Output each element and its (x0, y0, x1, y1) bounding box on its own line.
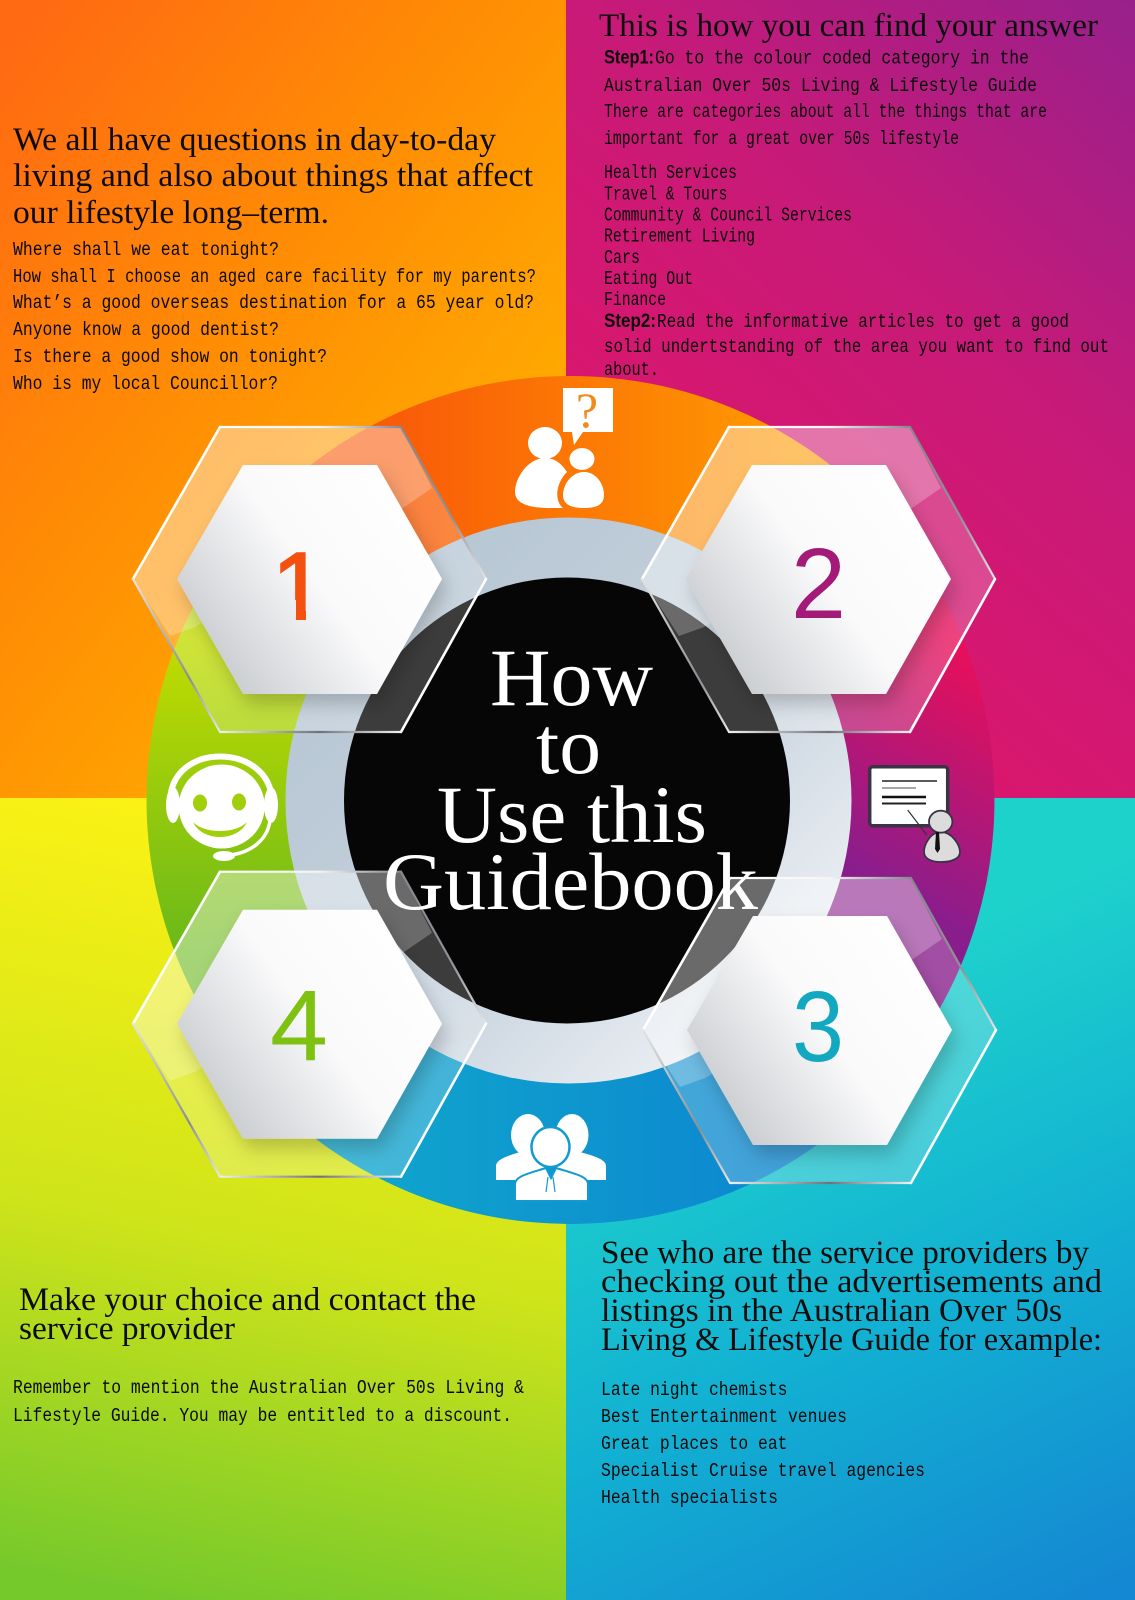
list: guide categories: Eating Out (604, 268, 693, 290)
icon: two people with question bubble: ? (576, 382, 598, 438)
text block: step 1: Go to the colour coded category in the (655, 48, 1029, 70)
icon: group of three people (496, 1114, 606, 1201)
list: service provider examples (601, 1379, 925, 1509)
background: orange quadrant (0, 0, 566, 798)
hexagon 1 (133, 427, 486, 732)
list: guide categories: Health Services (604, 162, 737, 184)
list: service provider examples: Late night chemists (601, 1379, 788, 1401)
heading: make your choice (19, 1282, 476, 1347)
hexagon 4 (133, 872, 486, 1177)
text block: step 2: Read the informative articles to get a good (657, 311, 1069, 333)
background: cyan-blue quadrant (566, 798, 1135, 1600)
text block: step 2 (604, 311, 1109, 381)
heading: everyday questions: our lifestyle long–term. (13, 195, 329, 231)
text block: step 2: Step2: (604, 311, 656, 332)
heading: see who are the service providers: Living & Lifestyle Guide for example: (601, 1322, 1102, 1358)
text block: example questions: Where shall we eat tonight? (13, 239, 279, 261)
text block: example questions: How shall I choose an aged care facility for my parents? (13, 266, 536, 288)
hexagon 3 (643, 878, 996, 1183)
heading: everyday questions (13, 122, 533, 231)
heading: make your choice: service provider (19, 1311, 235, 1347)
heading: see who are the service providers: listings in the Australian Over 50s (601, 1293, 1062, 1329)
text block: example questions (13, 239, 536, 395)
list: guide categories: Cars (604, 247, 640, 269)
icon: smiling headset agent (166, 756, 278, 861)
text block: mention the guide: Remember to mention the Australian Over 50s Living & (13, 1377, 524, 1399)
text block: example questions: Who is my local Councillor? (13, 373, 278, 395)
background: yellow-green quadrant (0, 798, 566, 1600)
text block: step 2: about. (604, 359, 659, 381)
text block: step 1: Step1: (604, 48, 654, 68)
title: Use this (437, 769, 707, 860)
hexagon 2 (642, 427, 995, 732)
text block: mention the guide (13, 1377, 524, 1427)
heading: make your choice: Make your choice and contact the (19, 1282, 476, 1318)
list: guide categories (604, 162, 852, 311)
background: magenta quadrant (566, 0, 1135, 798)
list: guide categories: Finance (604, 289, 666, 311)
icon: presenter at board (870, 767, 960, 862)
heading: everyday questions: We all have questions in day-to-day (13, 122, 496, 158)
title (383, 632, 758, 927)
text block: mention the guide: Lifestyle Guide. You may be entitled to a discount. (13, 1405, 512, 1427)
list: guide categories: Retirement Living (604, 226, 755, 248)
title: to (536, 700, 601, 791)
text block: example questions: Anyone know a good dentist? (13, 319, 279, 341)
number 1: 1 (272, 533, 325, 640)
number 2: 2 (791, 528, 846, 640)
text block: step 1: Australian Over 50s Living & Lifestyle Guide (604, 75, 1037, 97)
number 4: 4 (270, 970, 328, 1082)
list: service provider examples: Best Entertainment venues (601, 1406, 847, 1428)
central colour wheel (147, 376, 994, 1224)
text block: step 1 (604, 48, 1047, 150)
list: service provider examples: Specialist Cruise travel agencies (601, 1460, 925, 1482)
list: service provider examples: Health specialists (601, 1487, 778, 1509)
list: guide categories: Travel & Tours (604, 184, 728, 206)
title: Guidebook (383, 836, 758, 927)
text block: example questions: What’s a good overseas destination for a 65 year old? (13, 292, 534, 314)
list: guide categories: Community & Council Services (604, 205, 852, 227)
heading: see who are the service providers (601, 1235, 1103, 1358)
heading: everyday questions: living and also about things that affect (13, 158, 533, 194)
title: How (490, 632, 653, 723)
number 3: 3 (792, 971, 844, 1083)
heading: see who are the service providers: checking out the advertisements and (601, 1264, 1103, 1300)
icon: two people with question bubble (515, 382, 613, 508)
text block: example questions: Is there a good show on tonight? (13, 346, 327, 368)
list: service provider examples: Great places to eat (601, 1433, 788, 1455)
heading: see who are the service providers: See who are the service providers by (601, 1235, 1090, 1271)
text block: step 1: important for a great over 50s lifestyle (604, 128, 959, 150)
heading: find your answer: This is how you can find your answer (599, 8, 1098, 44)
